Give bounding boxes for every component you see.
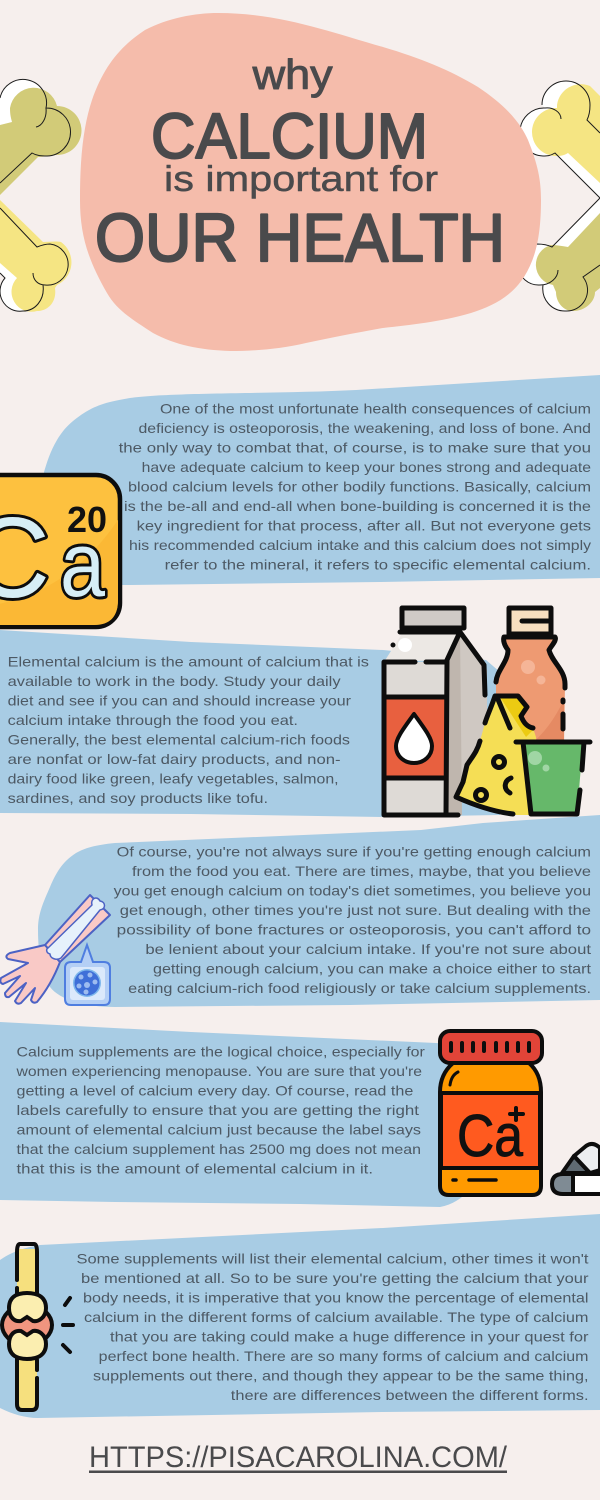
panel: elemental calcium foods (0, 630, 500, 817)
text block: paragraph 1: is the be-all and end-all when bone-building is concerned it is the (124, 498, 591, 514)
icon: pills (552, 1144, 600, 1194)
text block: paragraph 5: perfect bone health. There are so many forms of calcium and calcium (99, 1348, 588, 1364)
text block: paragraph 2: Generally, the best elemental calcium-rich foods (8, 732, 350, 748)
text block: paragraph 2: diet and see if you can and should increase your (8, 693, 351, 709)
text block: paragraph 4: getting a level of calcium every day. Of course, read the (16, 1083, 414, 1099)
icon: bone joint (2, 1244, 73, 1410)
title blob (80, 13, 541, 351)
text block: paragraph 4: that the calcium supplement has 2500 mg does not mean (16, 1141, 421, 1157)
text block: paragraph 2: Elemental calcium is the amount of calcium that is (8, 654, 369, 670)
panel: osteoporosis and elemental calcium (44, 375, 600, 585)
icon: upper left bone (0, 79, 82, 195)
icon: bottle (496, 608, 565, 745)
text block: paragraph 4: amount of elemental calcium just because the label says (16, 1122, 421, 1138)
text block: paragraph 1: blood calcium levels for other bodily functions. Basically, calcium (128, 478, 591, 494)
icon: lower left bone (0, 200, 71, 312)
text block: paragraph 4: labels carefully to ensure that you are getting the right (16, 1102, 419, 1118)
icon: fractured arm and x-ray bubble (0, 895, 110, 1005)
text block: paragraph 1: One of the most unfortunate health consequences of calcium (160, 400, 591, 416)
text block: paragraph 3: from the food you eat. There are times, maybe, that you believe (132, 863, 591, 879)
title (95, 51, 505, 276)
icon: green cup (516, 742, 590, 814)
text block: paragraph 1: refer to the mineral, it refers to specific elemental calcium. (165, 556, 591, 572)
text block: paragraph 4: Calcium supplements are the logical choice, especially for (16, 1044, 425, 1060)
title: why (252, 51, 333, 98)
title: OUR HEALTH (95, 200, 505, 276)
text block: paragraph 5: calcium in the different forms of calcium available. The type of calcium (84, 1309, 588, 1325)
text block: paragraph 1 (119, 400, 591, 572)
text block: paragraph 4: women experiencing menopause. You are sure that you're (15, 1063, 422, 1079)
icon: calcium element tile: a (60, 514, 106, 616)
icon: supplement bottle (440, 1031, 542, 1195)
text block: paragraph 3: possibility of bone fractures or osteoporosis, you can't afford to (117, 922, 591, 938)
text block: paragraph 3: you get enough calcium on today's diet sometimes, you believe you (114, 883, 591, 899)
text block: paragraph 1: the only way to combat that, of course, is to make sure that you (119, 440, 591, 456)
text block: paragraph 2: are nonfat or low-fat dairy products, and non- (8, 751, 341, 767)
text block: paragraph 5: supplements out there, and though they appear to be the same thing, (93, 1367, 588, 1383)
text block: paragraph 4 (15, 1044, 425, 1177)
icon: dairy products (384, 608, 590, 815)
text block: paragraph 1: his recommended calcium intake and this calcium does not simply (129, 537, 591, 553)
text block: paragraph 4: that this is the amount of elemental calcium in it. (16, 1161, 373, 1177)
icon: x-ray bubble (65, 945, 110, 1005)
icon: supplement bottle: Ca (457, 1103, 523, 1169)
text block: paragraph 1: deficiency is osteoporosis, the weakening, and loss of bone. And (138, 420, 591, 436)
text block: paragraph 3: Of course, you're not always sure if you're getting enough calcium (117, 844, 591, 860)
text block: paragraph 2: calcium intake through the food you eat. (8, 712, 298, 728)
text block: paragraph 1: have adequate calcium to keep your bones strong and adequate (142, 459, 591, 475)
text block: paragraph 5: Some supplements will list their elemental calcium, other times it won't (76, 1250, 589, 1266)
website link: HTTPS://PISACAROLINA.COM/ (89, 1441, 508, 1474)
icon: arm and hand (0, 895, 110, 1004)
text block: paragraph 5: there are differences between the different forms. (231, 1387, 589, 1403)
text block: paragraph 2 (8, 654, 369, 806)
title: is important for (164, 158, 438, 199)
title: CALCIUM (151, 100, 428, 172)
panel: supplements (0, 1022, 470, 1207)
text block: paragraph 5: body needs, it is imperative that you know the percentage of elemental (83, 1289, 588, 1305)
text block: paragraph 3: getting enough calcium, you can make a choice either to start (153, 961, 591, 977)
text block: paragraph 2: sardines, and soy products like tofu. (8, 790, 268, 806)
text block: paragraph 3 (114, 844, 591, 996)
text block: paragraph 3: eating calcium-rich food religiously or take calcium supplements. (128, 980, 591, 996)
text block: paragraph 2: available to work in the body. Study your daily (8, 673, 341, 689)
icon: cheese (456, 696, 540, 815)
text block: paragraph 5 (76, 1250, 589, 1403)
text block: paragraph 5: be mentioned at all. So to be sure you're getting the calcium that your (81, 1270, 589, 1286)
icon: lower right bone (518, 198, 600, 311)
icon: calcium element tile: 20 (67, 499, 107, 540)
text block: paragraph 3: be lenient about your calcium intake. If you're not sure about (145, 941, 591, 957)
icon: upper right bone (520, 81, 600, 198)
panel: enough calcium (38, 815, 600, 1007)
panel: forms of calcium (0, 1214, 600, 1418)
icon: calcium element tile (0, 475, 120, 627)
text block: paragraph 5: that you are taking could make a huge difference in your quest for (110, 1328, 589, 1344)
icon: milk carton (384, 608, 487, 815)
text block: paragraph 3: get enough, other times you're just not sure. But dealing with the (120, 902, 591, 918)
text block: paragraph 2: dairy food like green, leafy vegetables, salmon, (8, 771, 339, 787)
text block: paragraph 1: key ingredient for that process, after all. But not everyone gets (137, 518, 591, 534)
